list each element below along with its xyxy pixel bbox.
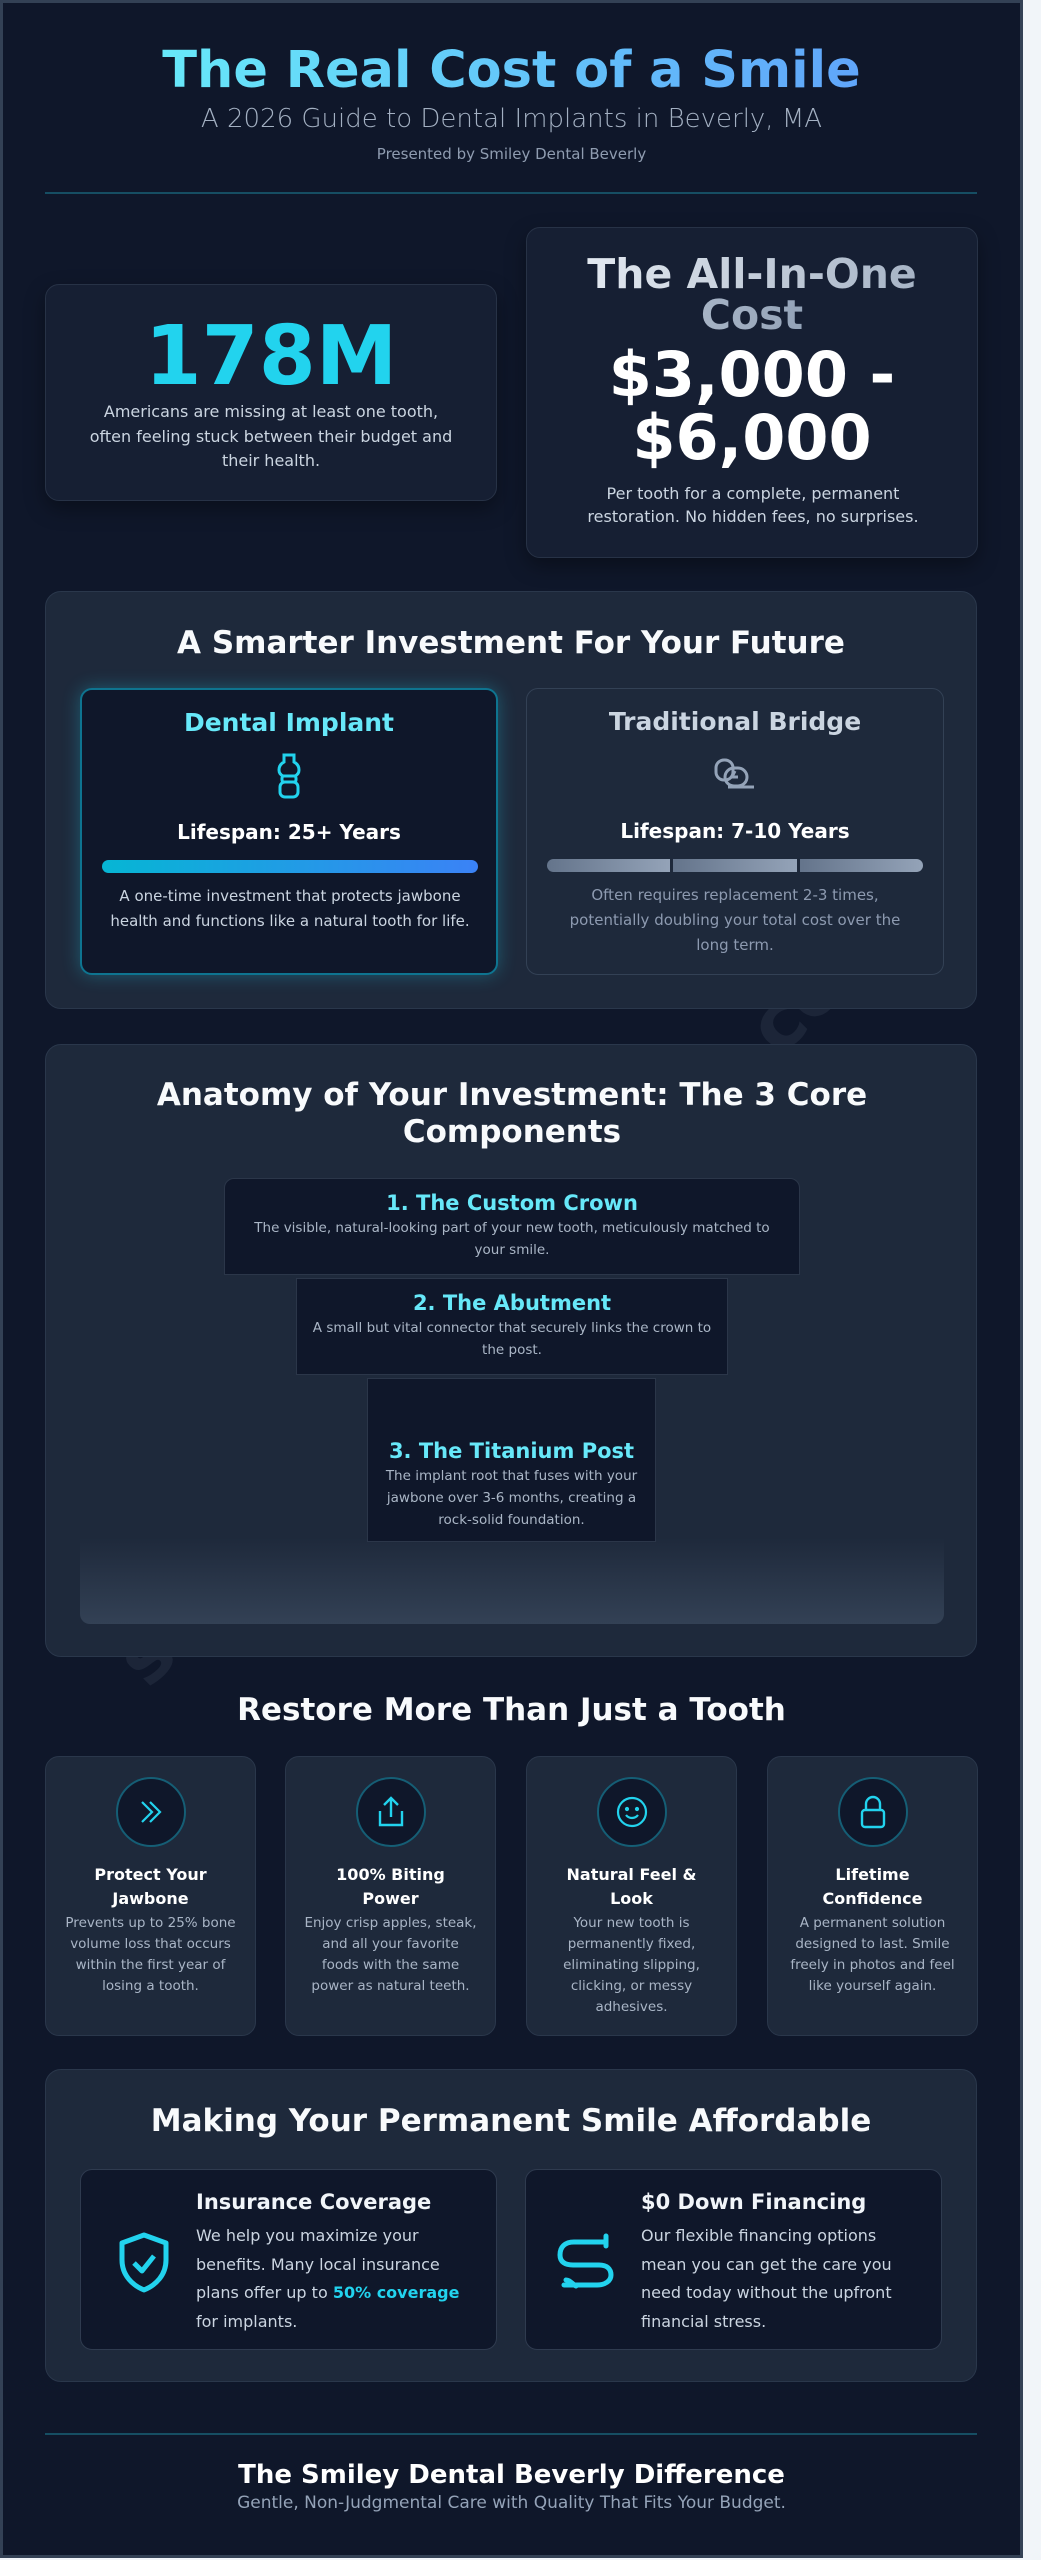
price range — [609, 338, 895, 474]
bar: implant — [102, 860, 478, 873]
feature: biting power: Enjoy crisp apples, steak, and all your favorite foods with the same power as natural teeth. — [304, 1915, 477, 1994]
icon: bridge — [714, 758, 754, 788]
card: traditional bridge — [526, 688, 944, 975]
stat card: 178M — [45, 284, 497, 501]
cost card — [526, 227, 978, 558]
bridge description: Often requires replacement 2-3 times, potentially doubling your total cost over the long term. — [570, 886, 900, 954]
icon: shield — [120, 2232, 168, 2292]
icon: implant — [278, 754, 300, 798]
heading: restore: Restore More Than Just a Tooth — [237, 1692, 786, 1728]
icon: financing — [558, 2234, 614, 2288]
card: insurance: We help you maximize your benefits. Many local insurance plans offer up to 50% coverage for implants. — [196, 2226, 459, 2330]
feature: biting power — [285, 1756, 496, 2036]
component: abutment: A small but vital connector that securely links the crown to the post. — [313, 1320, 711, 1358]
panel: anatomy — [45, 1044, 977, 1657]
heading: A Smarter Investment For Your Future — [177, 625, 845, 661]
bar: bridge segments — [547, 859, 923, 872]
feature: confidence — [767, 1756, 978, 2036]
bridge title: Traditional Bridge — [609, 707, 861, 736]
feature: confidence: Lifetime Confidence — [822, 1865, 922, 1908]
feature: jawbone: Protect Your Jawbone — [94, 1865, 207, 1908]
component: abutment — [296, 1278, 728, 1375]
component: crown — [224, 1178, 800, 1275]
card: insurance: Insurance Coverage — [196, 2190, 431, 2214]
feature: confidence: A permanent solution designed to last. Smile freely in photos and feel like yourself again. — [790, 1915, 955, 1994]
big number: 178M — [145, 309, 397, 404]
feature: jawbone: Prevents up to 25% bone volume loss that occurs within the first year of losing a tooth. — [65, 1915, 236, 1994]
footer subtitle: Gentle, Non-Judgmental Care with Quality That Fits Your Budget. — [237, 2493, 786, 2513]
subtitle: A 2026 Guide to Dental Implants in Beverly, MA — [201, 104, 822, 134]
feature: natural feel: Your new tooth is permanently fixed, eliminating slipping, clicking, or messy adhesives. — [563, 1915, 700, 2015]
implant title: Dental Implant — [184, 708, 394, 737]
component: post: 3. The Titanium Post — [389, 1439, 634, 1463]
card: financing: $0 Down Financing — [641, 2190, 866, 2214]
cost description: Per tooth for a complete, permanent restoration. No hidden fees, no surprises. — [587, 484, 919, 526]
component: crown: 1. The Custom Crown — [386, 1191, 638, 1215]
presented by: Presented by Smiley Dental Beverly — [377, 145, 646, 163]
price range: $6,000 — [632, 401, 872, 474]
icon: smile — [596, 1777, 666, 1847]
cost heading — [587, 250, 917, 339]
implant description: A one-time investment that protects jawbone health and functions like a natural tooth for life. — [110, 887, 470, 930]
component: post — [367, 1378, 656, 1542]
cost heading: Cost — [701, 291, 803, 339]
cost heading: The All-In-One — [587, 250, 917, 298]
watermark: smileydentalbeverly.com — [98, 883, 917, 1703]
card: financing: Our flexible financing options mean you can get the care you need today without the upfront financial stress. — [641, 2226, 892, 2330]
card: dental implant — [80, 688, 498, 975]
card: insurance — [80, 2169, 497, 2350]
feature: biting power: 100% Biting Power — [336, 1865, 445, 1908]
lifespan: Lifespan: 25+ Years — [177, 820, 401, 844]
price range: $3,000 - — [609, 338, 895, 411]
icon: chevrons — [116, 1777, 186, 1847]
feature: natural feel — [526, 1756, 737, 2036]
panel: smarter investment — [45, 591, 977, 1009]
component: crown: The visible, natural-looking part of your new tooth, meticulously matched to your smile. — [254, 1220, 770, 1258]
heading: Making Your Permanent Smile Affordable — [151, 2103, 871, 2139]
card: financing — [525, 2169, 942, 2350]
panel: affordable — [45, 2069, 977, 2382]
title: The Real Cost of a Smile — [162, 41, 861, 100]
lifespan: Lifespan: 7-10 Years — [620, 819, 850, 843]
component: abutment: 2. The Abutment — [413, 1291, 611, 1315]
gum base — [80, 1538, 944, 1624]
component: post: The implant root that fuses with your jawbone over 3-6 months, creating a rock-solid foundation. — [386, 1468, 637, 1528]
stat description: Americans are missing at least one tooth, often feeling stuck between their budget and their health. — [90, 402, 452, 470]
icon: lock — [838, 1777, 908, 1847]
feature: natural feel: Natural Feel & Look — [567, 1865, 696, 1908]
icon: upload — [356, 1777, 426, 1847]
footer title: The Smiley Dental Beverly Difference — [238, 2460, 785, 2490]
feature: jawbone — [45, 1756, 256, 2036]
heading: Anatomy of Your Investment: The 3 Core Components — [157, 1077, 867, 1150]
